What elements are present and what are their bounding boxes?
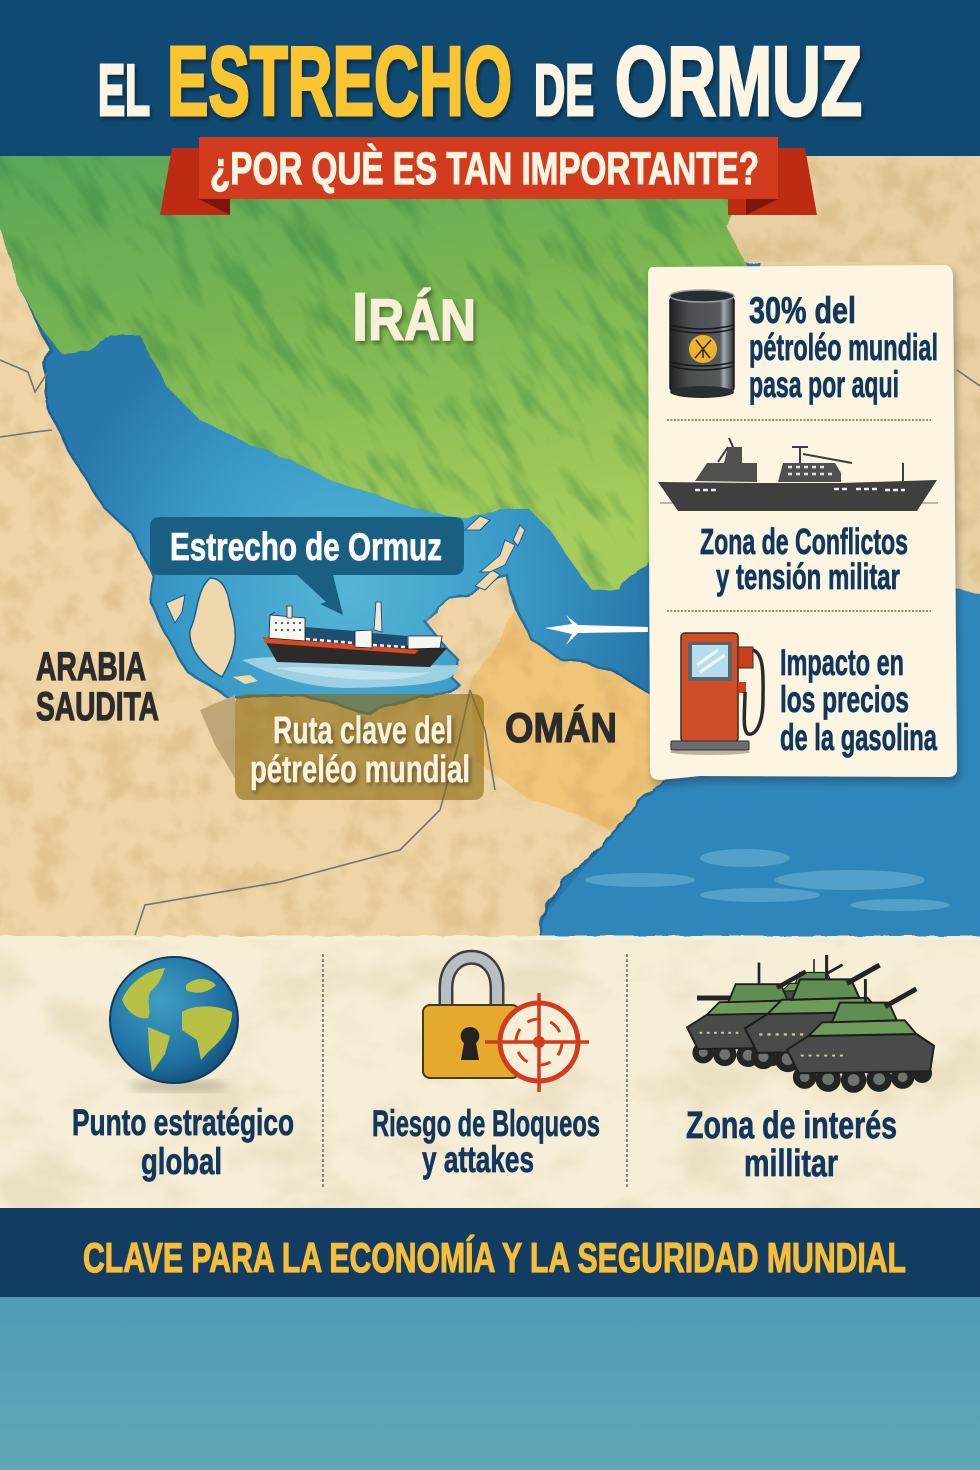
label: Ruta clave del petroleo mundial: Ruta clave del [273,710,453,752]
text: Impacto en los precios: Impacto en [780,642,904,683]
ribbon subtitle [160,137,817,215]
text: Zona de interés militar [686,1105,897,1185]
ship deck windows [306,639,406,647]
bridge windows [275,623,301,630]
ship mast [270,602,382,632]
Iran terrain streaks [0,156,744,590]
left tank gun [697,996,745,1000]
bottom teal area [0,1297,980,1470]
island: Qatar [190,578,235,677]
globe continents [122,968,232,1072]
panel: key facts [648,265,957,780]
ship decks [305,627,407,648]
text: Zona de interés militar: Zona de interés [686,1105,897,1147]
callout: Estrecho de Ormuz [150,517,464,615]
tanker ship [263,602,447,667]
land texture [0,156,980,946]
label: Irán: IRÁN [352,279,476,355]
ribbon text: ¿POR QUÈ ES TAN IMPORTANTE? [210,143,759,194]
land: coast shadow [0,228,670,945]
paper texture [0,940,980,1208]
header band [0,0,980,158]
lock body [423,1005,519,1078]
target [485,993,589,1092]
text: Punto estratégico global: Punto estratégico [72,1102,294,1143]
foam inner [275,667,430,680]
ship red stripe [263,637,419,654]
land: Oman [470,612,670,830]
ribbon tails [160,148,817,215]
island: small south [233,675,258,684]
island: Bahrain [166,595,185,623]
divider [667,610,931,612]
text: Punto estratégico global: global [141,1141,222,1182]
text: Riesgo de Bloqueos: Riesgo de Bloqueos [372,1103,600,1144]
text: Zona de Conflictos [700,521,908,597]
text: 30% del petroleo mundial: 30% del [749,290,856,331]
ribbon band [199,137,778,199]
label: Arabia Saudita: ARABIA [36,645,146,689]
label: Omán: OMÁN [505,704,617,751]
icon: tanks [687,955,934,1093]
land: northeast corner [725,150,980,598]
callout: Estrecho de Ormuz: Estrecho de Ormuz [170,526,442,569]
barrel emblem [689,335,717,363]
title: ESTRECHO [167,26,512,136]
text: 30% del petroleo mundial [749,290,938,405]
warship windows [695,489,905,490]
icon: gas pump [670,633,763,755]
label: Ruta clave del petroleo mundial [235,694,484,800]
column dividers [323,954,627,1188]
water foam under ship [242,657,458,688]
land: shaded coastal area [200,695,235,778]
icon: padlock with target [423,957,589,1092]
footer band [0,1208,980,1297]
borders [0,360,980,935]
land: Arabia [0,150,980,945]
ship bridge [269,615,442,649]
clouds over sea [585,849,950,911]
panel: bottom strip [0,936,980,1215]
text: Riesgo de Bloqueos: y attakes [422,1139,534,1180]
warship superstructure [695,447,841,482]
label: Arabia Saudita [36,645,159,729]
ship hull [263,637,447,667]
label: Arabia Saudita: SAUDITA [36,685,159,729]
icon: warship [658,438,938,511]
keyhole [461,1027,479,1060]
text: Zona de interés militar: millitar [744,1143,838,1185]
text: Punto estratégico global [72,1102,294,1182]
divider [667,419,931,421]
icon: globe [110,957,238,1092]
title: EL [98,51,150,131]
icon: oil barrel [670,290,734,398]
map [0,156,980,938]
warship masts [718,438,903,481]
islands: strait [465,516,525,590]
arrow: jet heading west [545,615,648,645]
label: Ruta clave del petroleo mundial: pétreléo mundial [250,749,470,791]
Iran land [0,150,770,590]
text: Riesgo de Bloqueos [372,1103,600,1180]
open sea [520,590,980,945]
title: DE [534,51,594,131]
title: ORMUZ [615,26,862,136]
lock shackle [446,957,497,1010]
text: Impacto en los precios: los precios [780,679,909,720]
water: gulf and sea [0,155,980,945]
text: Impacto en los precios [780,642,937,758]
header edge over map [0,0,980,156]
warship hull [658,480,937,511]
ribbon folds [199,199,778,215]
